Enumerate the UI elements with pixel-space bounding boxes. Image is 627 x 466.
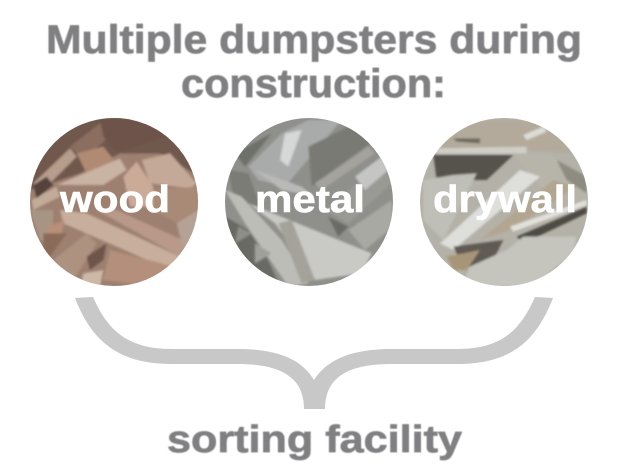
curly brace [75,297,553,409]
title [46,18,582,106]
title: construction: [181,62,446,106]
title: Multiple dumpsters during [46,18,582,62]
panel: drywall circle [419,118,588,288]
caption: sorting facility: sorting facility [167,419,462,461]
label: wood: wood [59,179,170,221]
panel: wood circle [27,117,200,287]
label: drywall: drywall [433,179,577,221]
label: metal: metal [255,179,365,221]
panel: metal circle [225,118,393,287]
